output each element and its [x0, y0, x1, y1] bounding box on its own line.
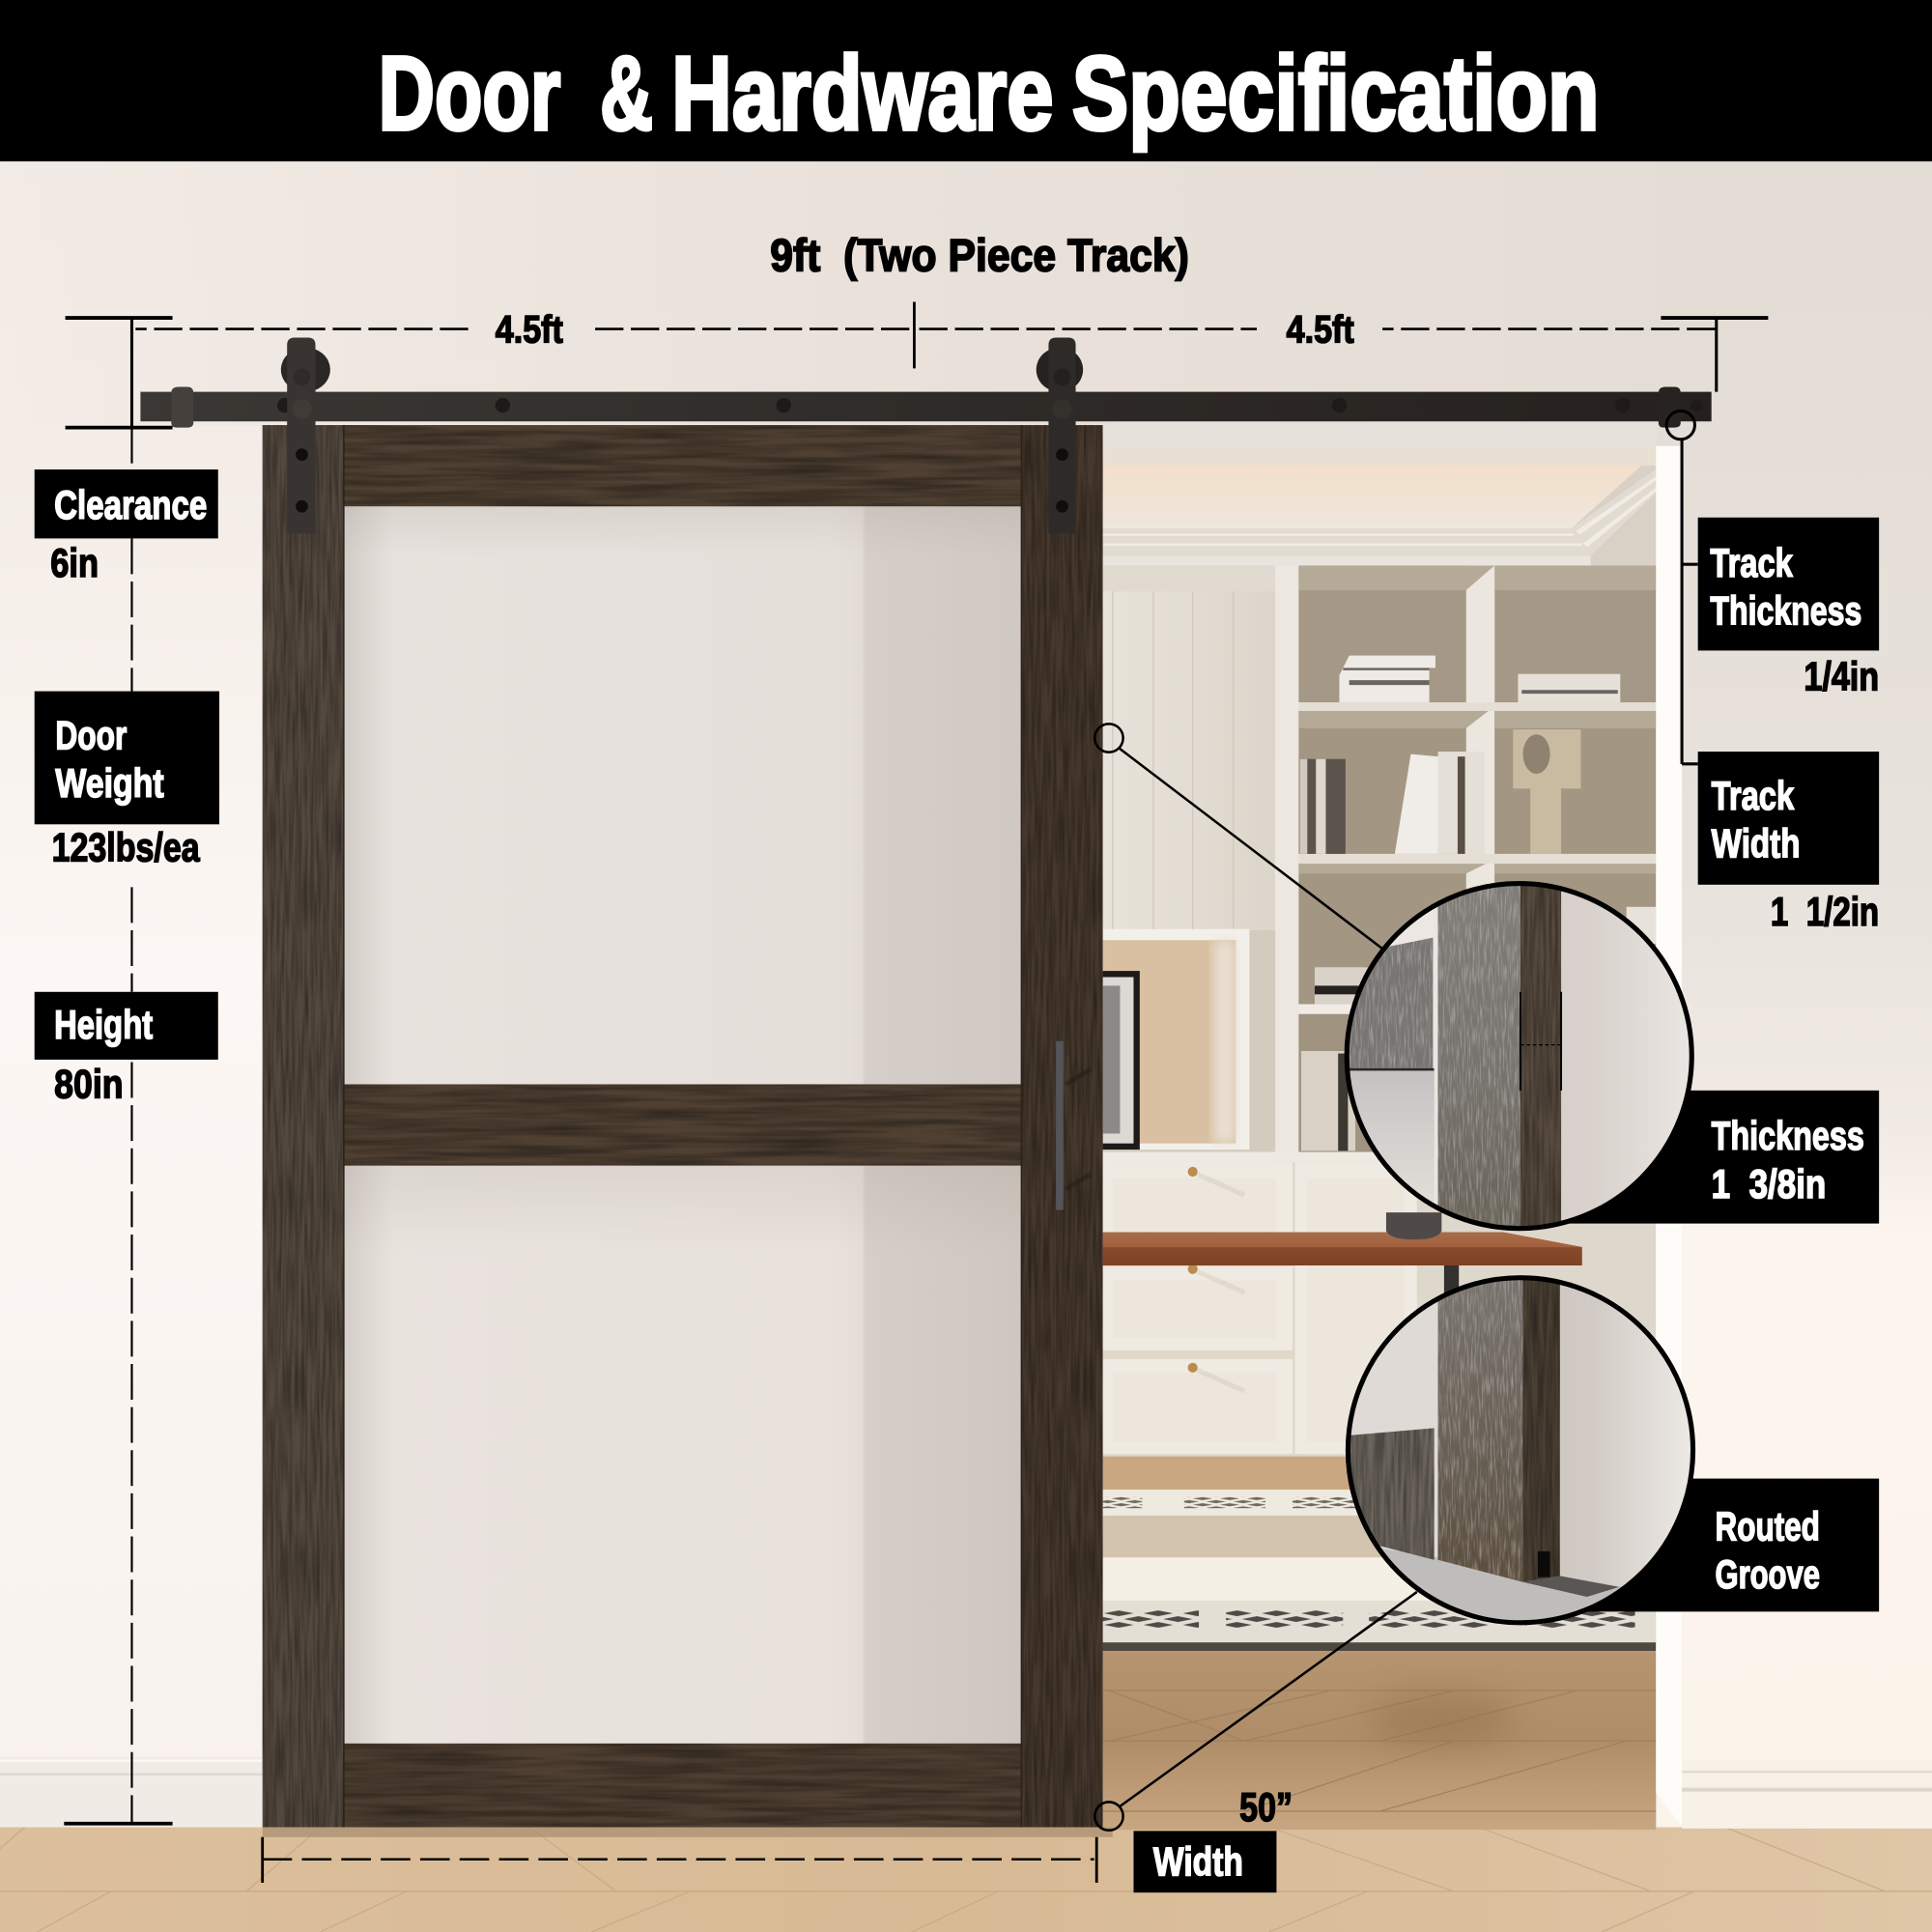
title: Door [379, 35, 560, 152]
back wall right side [1417, 1152, 1656, 1497]
thickness callout: Thickness [1712, 1113, 1864, 1158]
track rivets [185, 398, 1703, 412]
title [379, 35, 1600, 152]
track width callout: Width [1712, 821, 1801, 867]
height callout: Height [54, 1002, 153, 1047]
left baseboard [0, 1757, 263, 1829]
track thickness callout: Track [1710, 540, 1793, 585]
height callout [35, 992, 218, 1106]
right hanger [1037, 337, 1083, 533]
track width callout [1698, 752, 1879, 934]
room seen through the opening [1103, 421, 1658, 1830]
track thickness callout: 1/4in [1804, 653, 1879, 698]
right baseboard [1682, 1759, 1932, 1829]
wall panelling [1103, 565, 1275, 935]
clearance callout [35, 469, 218, 585]
track total length label: 9ft (Two Piece Track) [770, 231, 1189, 282]
left hanger [281, 337, 330, 533]
width dimension line [263, 1837, 1096, 1883]
title bar [0, 0, 1932, 161]
detail circle: door thickness [1343, 881, 1700, 1233]
back wall by art [1103, 930, 1275, 1152]
handle [1056, 1041, 1091, 1210]
track thickness callout [1698, 518, 1879, 698]
door edge [1523, 1275, 1560, 1582]
routed groove callout [1540, 1479, 1879, 1611]
cabinets [1103, 1152, 1658, 1162]
cove light [1103, 466, 1641, 528]
height dimension line [130, 428, 132, 1824]
frosted glass panels [344, 506, 1021, 1086]
crown moulding [1103, 469, 1658, 555]
track dimension line [64, 301, 1768, 1824]
right 4.5ft label: 4.5ft [1287, 309, 1354, 352]
right door jamb [1656, 446, 1682, 1826]
door rails [344, 425, 1021, 506]
door stiles [263, 425, 344, 1828]
shelf frame [1275, 565, 1656, 1169]
end stops [171, 387, 193, 428]
door weight callout: Door [55, 713, 127, 758]
lower panel [1348, 1428, 1435, 1560]
width callout: Width [1153, 1838, 1243, 1884]
track width callout: 1 1/2in [1771, 889, 1879, 934]
title: Hardware [671, 35, 1054, 152]
track thickness callout: Thickness [1710, 588, 1861, 634]
floor and rug [1103, 1457, 1656, 1491]
door floor shadow [263, 1828, 1113, 1837]
detail circle: routed groove [1343, 1275, 1700, 1633]
title: Specification [1072, 35, 1600, 152]
clearance callout: Clearance [54, 482, 207, 527]
back wall upper [1103, 466, 1658, 577]
thickness callout [1540, 1091, 1879, 1224]
width callout: 50” [1239, 1784, 1293, 1830]
routed groove callout: Routed [1716, 1503, 1820, 1548]
art frame [1103, 929, 1249, 1150]
routed groove notch [1538, 1551, 1550, 1577]
width callout [1133, 1784, 1293, 1892]
routed groove leader [1094, 1592, 1417, 1831]
sculpture [1513, 729, 1580, 854]
barn door [263, 425, 1103, 1828]
floor [1381, 1548, 1621, 1620]
bowl [1386, 1212, 1441, 1239]
front wood floor [0, 1828, 1932, 1932]
height callout: 80in [54, 1061, 124, 1106]
track callout connector [1666, 411, 1698, 764]
door front [1438, 1275, 1523, 1582]
rug diamond bands [1103, 1497, 1635, 1628]
books [1339, 656, 1435, 702]
barn track [140, 387, 1712, 428]
glass shadows [344, 506, 393, 1745]
table [1444, 1264, 1459, 1301]
thickness callout: 1 3/8in [1712, 1161, 1826, 1207]
door weight callout: 123lbs/ea [52, 825, 200, 870]
title: & [600, 35, 653, 152]
ceiling soffit [1103, 421, 1658, 450]
door thickness leader [1094, 724, 1382, 949]
door weight callout [35, 692, 219, 870]
track width callout: Track [1712, 773, 1795, 818]
clearance callout: 6in [50, 540, 99, 585]
left 4.5ft label: 4.5ft [496, 309, 563, 352]
door weight callout: Weight [55, 760, 164, 806]
routed groove callout: Groove [1716, 1551, 1820, 1597]
